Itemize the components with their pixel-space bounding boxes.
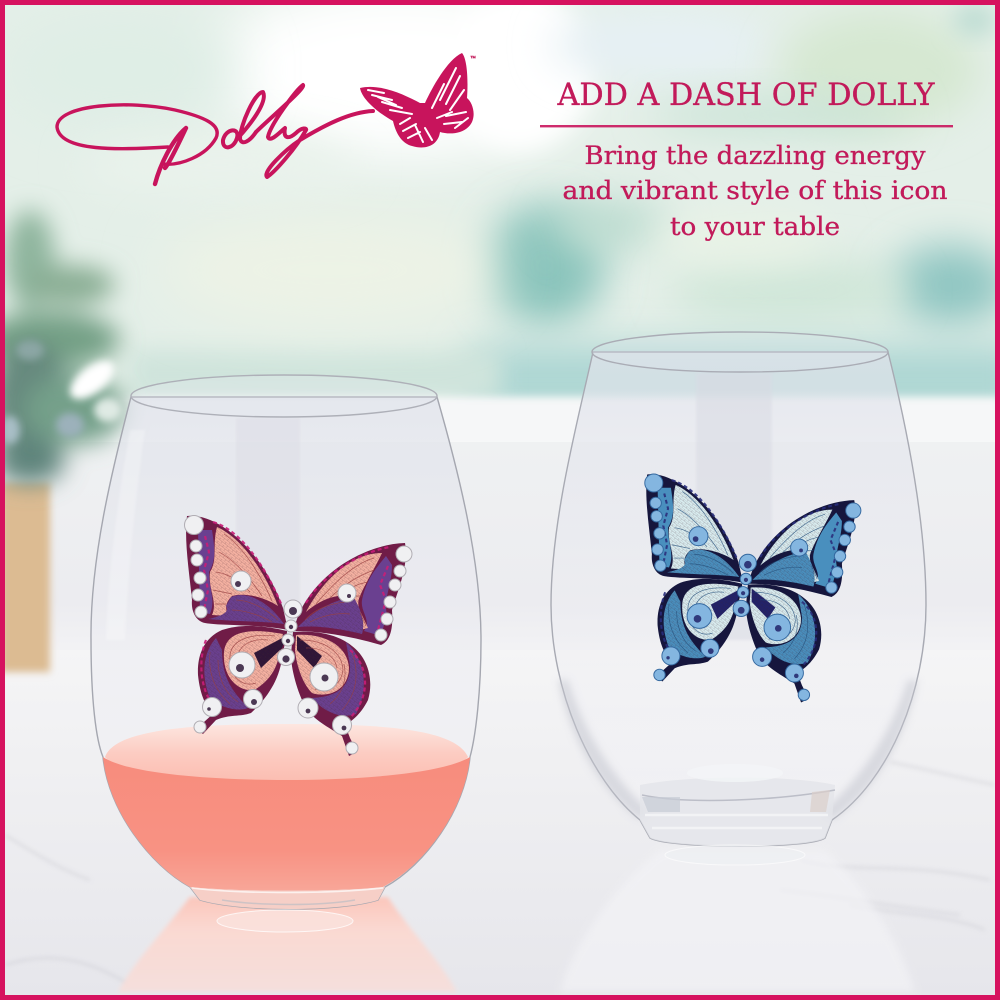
inner reflection bands xyxy=(106,418,300,650)
thick glass base xyxy=(640,764,835,846)
tagline xyxy=(562,141,948,242)
pink mosaic butterfly xyxy=(184,516,412,756)
glass body xyxy=(91,397,481,909)
blue mosaic butterfly xyxy=(645,474,861,702)
headline: ADD A DASH OF DOLLY xyxy=(557,77,935,113)
inner reflection band xyxy=(696,373,772,640)
signature strokes xyxy=(57,85,373,184)
logo butterfly xyxy=(360,53,476,147)
marble veins xyxy=(5,762,995,985)
blurred potted plant xyxy=(0,210,125,672)
glass rim xyxy=(592,332,888,372)
tagline: Bring the dazzling energy xyxy=(584,141,926,171)
stemless glass: empty xyxy=(551,332,926,865)
pink drink xyxy=(103,724,470,909)
glass body xyxy=(551,352,926,846)
clear glass reflection on counter xyxy=(560,850,915,992)
tagline: and vibrant style of this icon xyxy=(562,176,948,206)
base ring reflection xyxy=(665,845,805,865)
headline divider xyxy=(540,125,953,127)
bowl edge shading xyxy=(558,680,650,820)
glass rim xyxy=(131,375,437,417)
trademark: ™ xyxy=(470,55,476,62)
Dolly signature logo xyxy=(57,53,476,184)
pink reflection on counter xyxy=(118,897,457,992)
base ring reflection xyxy=(217,910,353,932)
tagline: to your table xyxy=(670,212,840,242)
wine glass: pink drink xyxy=(91,375,481,932)
